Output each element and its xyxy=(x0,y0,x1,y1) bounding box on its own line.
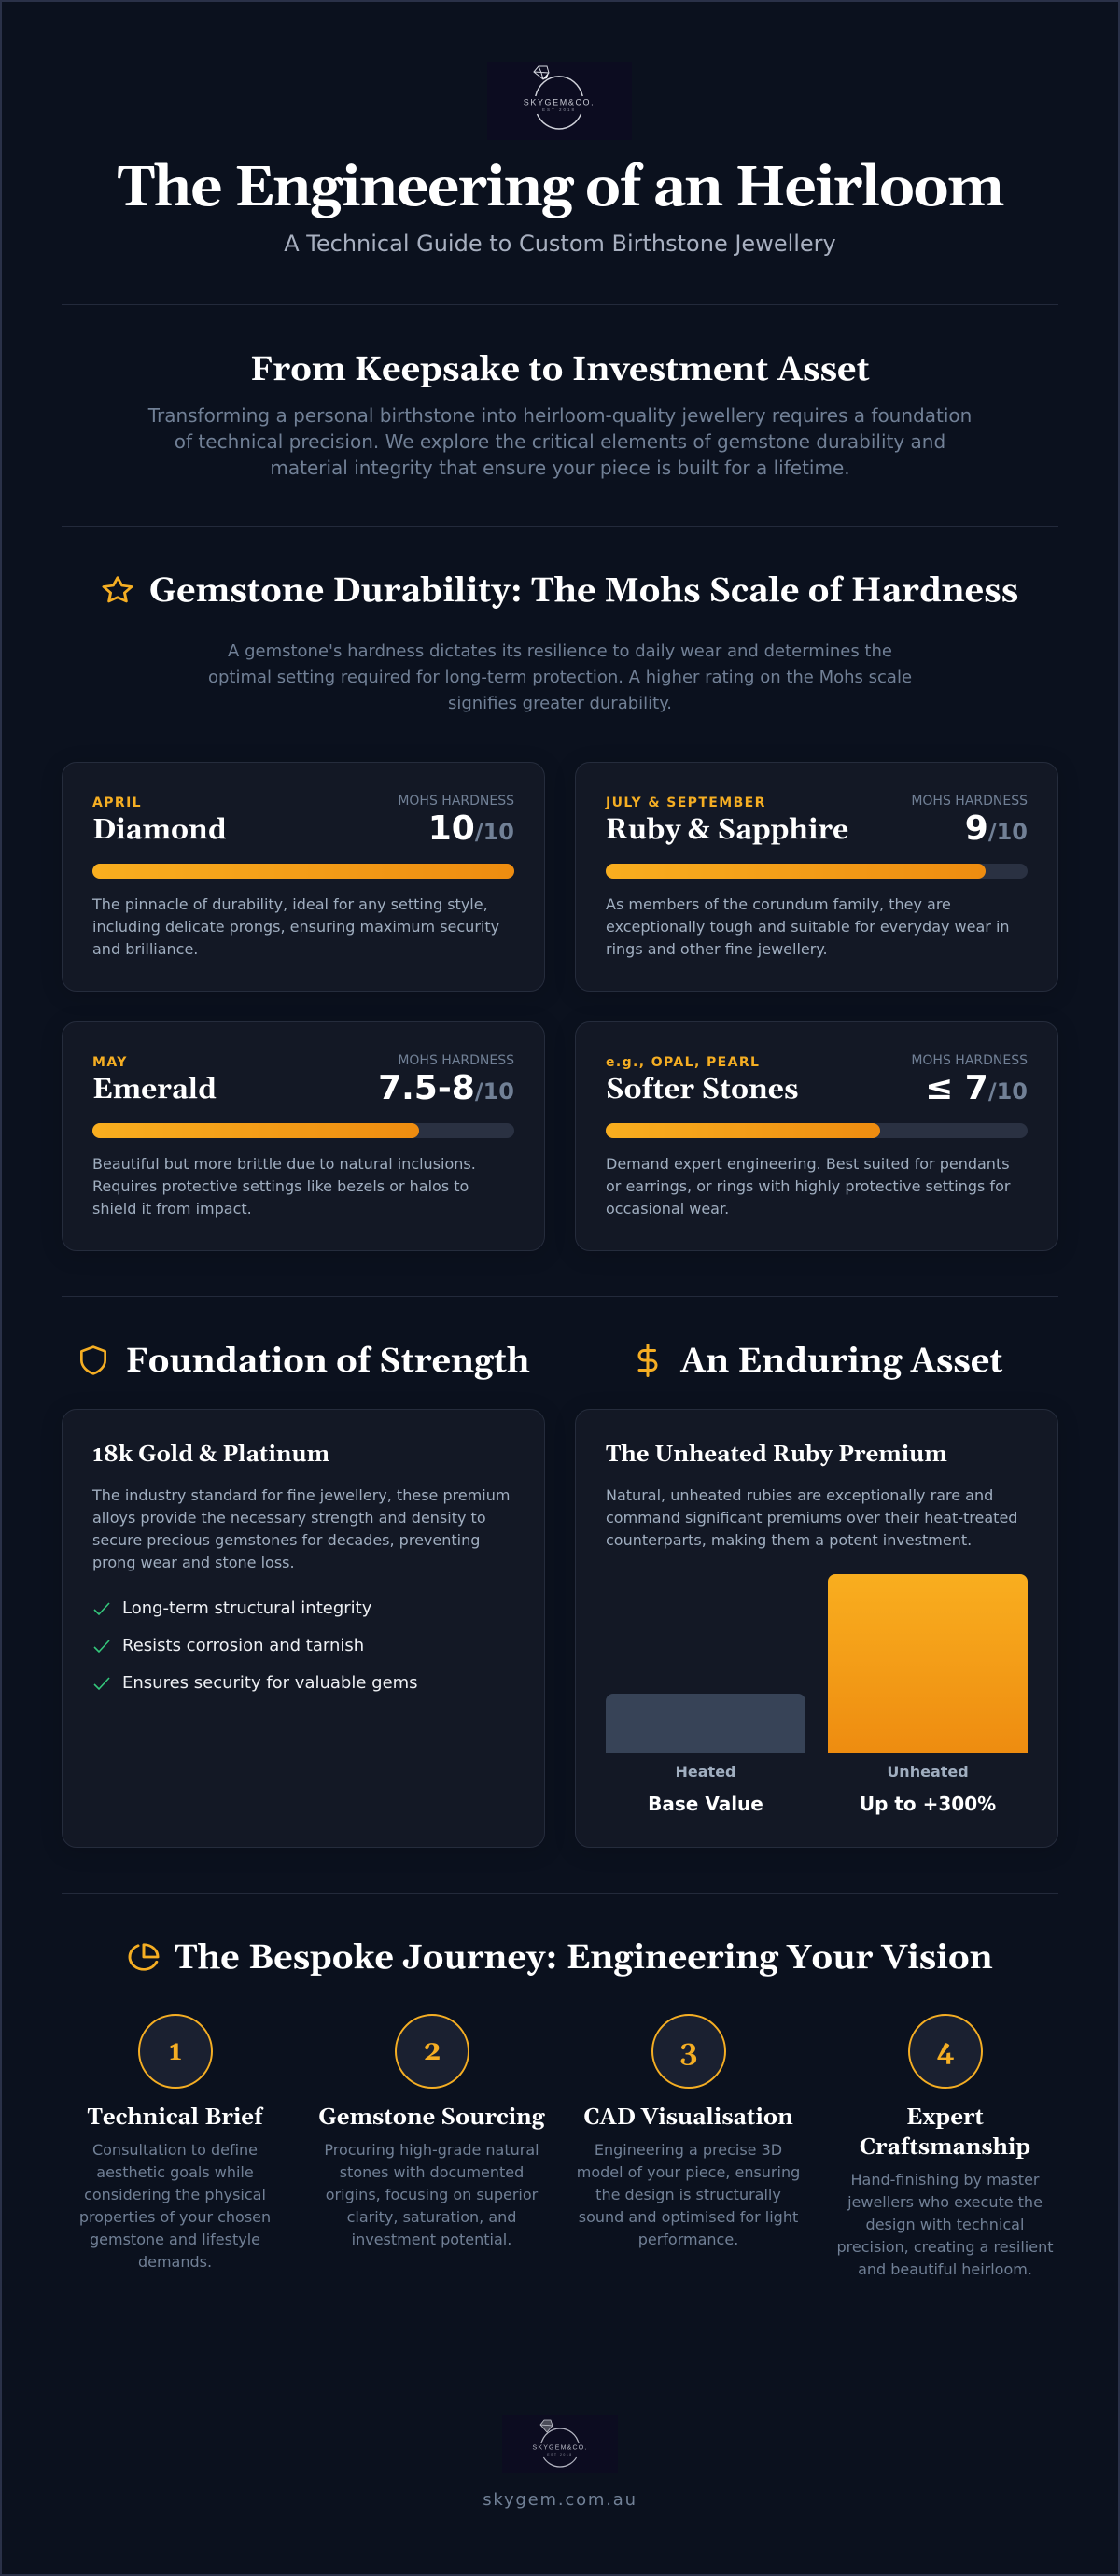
number badge xyxy=(138,2014,213,2089)
step title: Craftsmanship xyxy=(860,2134,1030,2162)
icon: pie chart xyxy=(129,1943,159,1971)
value: heated: Base Value xyxy=(648,1793,763,1815)
hardness score: 9/10 xyxy=(965,809,1028,848)
number badge: 1 xyxy=(169,2034,182,2070)
hardness label: MOHS HARDNESS xyxy=(398,794,514,809)
panel: unheated ruby premium xyxy=(575,1409,1058,1848)
hardness label: MOHS HARDNESS xyxy=(398,1053,514,1068)
text: durability intro: signifies greater durability. xyxy=(448,694,672,713)
description xyxy=(606,895,1010,958)
step title: Gemstone Sourcing xyxy=(318,2104,545,2133)
step description: Consultation to define xyxy=(92,2141,258,2159)
step title: Expert xyxy=(906,2104,984,2133)
hardness bar xyxy=(92,864,514,879)
label: heated: Heated xyxy=(676,1763,735,1781)
description: prong wear and stone loss. xyxy=(92,1554,295,1571)
description xyxy=(92,1155,476,1218)
description: rings and other fine jewellery. xyxy=(606,940,828,958)
panel: gold and platinum xyxy=(62,1409,545,1848)
step title xyxy=(860,2104,1030,2162)
description: As members of the corundum family, they are xyxy=(606,895,951,913)
description: command significant premiums over their heat-treated xyxy=(606,1509,1017,1527)
step title: CAD Visualisation xyxy=(583,2104,793,2133)
step description xyxy=(577,2141,800,2248)
examples: e.g., OPAL, PEARL xyxy=(606,1055,760,1070)
step description: aesthetic goals while xyxy=(96,2163,254,2181)
description: Demand expert engineering. Best suited for pendants xyxy=(606,1155,1010,1173)
heading: intro: From Keepsake to Investment Asset xyxy=(250,350,870,392)
description: Requires protective settings like bezels or halos to xyxy=(92,1177,469,1195)
step description: considering the physical xyxy=(84,2186,266,2203)
step description: jewellers who execute the xyxy=(847,2193,1043,2211)
text: durability intro xyxy=(208,641,912,713)
step 1 xyxy=(79,2014,271,2271)
text: durability intro: A gemstone's hardness dictates its resilience to daily wear and determines the xyxy=(228,641,892,661)
panel: emerald xyxy=(62,1021,545,1251)
icon: dollar xyxy=(638,1344,657,1377)
hardness bar xyxy=(606,1123,1028,1138)
number badge xyxy=(908,2014,983,2089)
heading: an enduring asset: An Enduring Asset xyxy=(680,1342,1003,1384)
step description: precision, creating a resilient xyxy=(836,2238,1053,2256)
panel: diamond xyxy=(62,762,545,992)
text: intro: Transforming a personal birthstone into heirloom-quality jewellery requires a foundation xyxy=(148,404,972,427)
description xyxy=(606,1155,1010,1218)
month: MAY xyxy=(92,1055,128,1070)
card title: The Unheated Ruby Premium xyxy=(606,1442,947,1470)
number badge: 4 xyxy=(936,2034,955,2070)
subtitle: A Technical Guide to Custom Birthstone Jewellery xyxy=(284,231,836,257)
description: alloys provide the necessary strength and density to xyxy=(92,1509,486,1527)
step description: gemstone and lifestyle xyxy=(90,2231,260,2248)
description: or earrings, or rings with highly protective settings for xyxy=(606,1177,1010,1195)
step description: origins, focusing on superior xyxy=(326,2186,538,2203)
list item 3: Ensures security for valuable gems xyxy=(122,1673,418,1693)
step title: Technical Brief xyxy=(88,2104,262,2133)
step 3 xyxy=(577,2014,800,2248)
step description: stones with documented xyxy=(340,2163,524,2181)
step 2 xyxy=(318,2014,545,2248)
panel: ruby and sapphire xyxy=(575,762,1058,992)
description: occasional wear. xyxy=(606,1200,729,1218)
step description: clarity, saturation, and xyxy=(347,2208,516,2226)
number badge xyxy=(651,2014,726,2089)
step description xyxy=(324,2141,539,2248)
text: durability intro: optimal setting required for long-term protection. A higher rating on the Mohs scale xyxy=(208,668,912,687)
text: intro: of technical precision. We explore the critical elements of gemstone durability and xyxy=(175,430,945,453)
step description: Hand-finishing by master xyxy=(850,2171,1040,2189)
hardness label: MOHS HARDNESS xyxy=(911,794,1028,809)
description: The pinnacle of durability, ideal for any setting style, xyxy=(92,895,488,913)
hardness bar xyxy=(606,864,1028,879)
month: APRIL xyxy=(92,795,142,810)
description xyxy=(606,1486,1017,1549)
footer url: skygem.com.au xyxy=(483,2490,637,2510)
card title: 18k Gold & Platinum xyxy=(92,1442,329,1470)
stone name: Softer Stones xyxy=(606,1073,798,1108)
logo: footer: SKYGEM&CO. xyxy=(532,2444,588,2452)
icon: shield xyxy=(80,1345,106,1375)
description: Beautiful but more brittle due to natural inclusions. xyxy=(92,1155,476,1173)
description: including delicate prongs, ensuring maximum security xyxy=(92,918,499,936)
step description: demands. xyxy=(138,2253,212,2271)
description: shield it from impact. xyxy=(92,1200,252,1218)
stone name: Diamond xyxy=(92,813,227,849)
step description: and beautiful heirloom. xyxy=(858,2260,1032,2278)
description xyxy=(91,1486,510,1571)
description: counterparts, making them a potent investment. xyxy=(606,1531,972,1549)
step description: the design is structurally xyxy=(595,2186,781,2203)
stone name: Emerald xyxy=(92,1073,217,1108)
hardness bar xyxy=(92,1123,514,1138)
heading: bespoke journey: The Bespoke Journey: Engineering Your Vision xyxy=(175,1938,993,1980)
description xyxy=(91,895,499,958)
value: unheated: Up to +300% xyxy=(860,1793,996,1815)
step description: design with technical xyxy=(866,2216,1024,2233)
logo: header: EST 2018 xyxy=(542,107,576,112)
month: JULY & SEPTEMBER xyxy=(606,795,766,810)
label: unheated: Unheated xyxy=(887,1763,969,1781)
logo: footer: EST 2018 xyxy=(547,2453,573,2456)
list item 1: Long-term structural integrity xyxy=(122,1598,371,1618)
number badge: 2 xyxy=(424,2034,441,2070)
step description xyxy=(836,2171,1053,2278)
description: exceptionally tough and suitable for everyday wear in xyxy=(606,918,1010,936)
step 4 xyxy=(836,2014,1053,2278)
stone name: Ruby & Sapphire xyxy=(606,813,848,849)
logo: footer xyxy=(532,2420,588,2468)
step description: performance. xyxy=(638,2231,738,2248)
title: The Engineering of an Heirloom xyxy=(117,153,1003,225)
step description: Engineering a precise 3D xyxy=(595,2141,782,2159)
step description: investment potential. xyxy=(352,2231,511,2248)
heading: foundation of strength: Foundation of Strength xyxy=(125,1342,530,1384)
step description: model of your piece, ensuring xyxy=(577,2163,800,2181)
hardness label: MOHS HARDNESS xyxy=(911,1053,1028,1068)
logo: header: SKYGEM&CO. xyxy=(524,97,595,106)
description: secure precious gemstones for decades, preventing xyxy=(92,1531,480,1549)
description: and brilliance. xyxy=(92,940,198,958)
number badge: 3 xyxy=(680,2034,697,2070)
heading: gemstone durability: Gemstone Durability: The Mohs Scale of Hardness xyxy=(149,571,1018,613)
hardness score: 7.5-8/10 xyxy=(378,1069,514,1107)
bar: heated xyxy=(606,1694,805,1753)
icon: star xyxy=(102,576,133,603)
description: Natural, unheated rubies are exceptionally rare and xyxy=(606,1486,993,1504)
list item 2: Resists corrosion and tarnish xyxy=(122,1636,364,1655)
hardness score: 10/10 xyxy=(428,809,514,848)
text: intro: material integrity that ensure your piece is built for a lifetime. xyxy=(270,457,850,479)
step description: sound and optimised for light xyxy=(579,2208,798,2226)
step description xyxy=(79,2141,271,2271)
logo: header xyxy=(524,65,595,130)
hardness score: ≤ 7/10 xyxy=(925,1069,1028,1107)
step description: Procuring high-grade natural xyxy=(324,2141,539,2159)
step description: properties of your chosen xyxy=(79,2208,271,2226)
number badge xyxy=(395,2014,469,2089)
description: The industry standard for fine jewellery, these premium xyxy=(92,1486,510,1504)
panel: softer stones xyxy=(575,1021,1058,1251)
bar: unheated xyxy=(828,1574,1028,1753)
text: intro xyxy=(147,404,972,479)
